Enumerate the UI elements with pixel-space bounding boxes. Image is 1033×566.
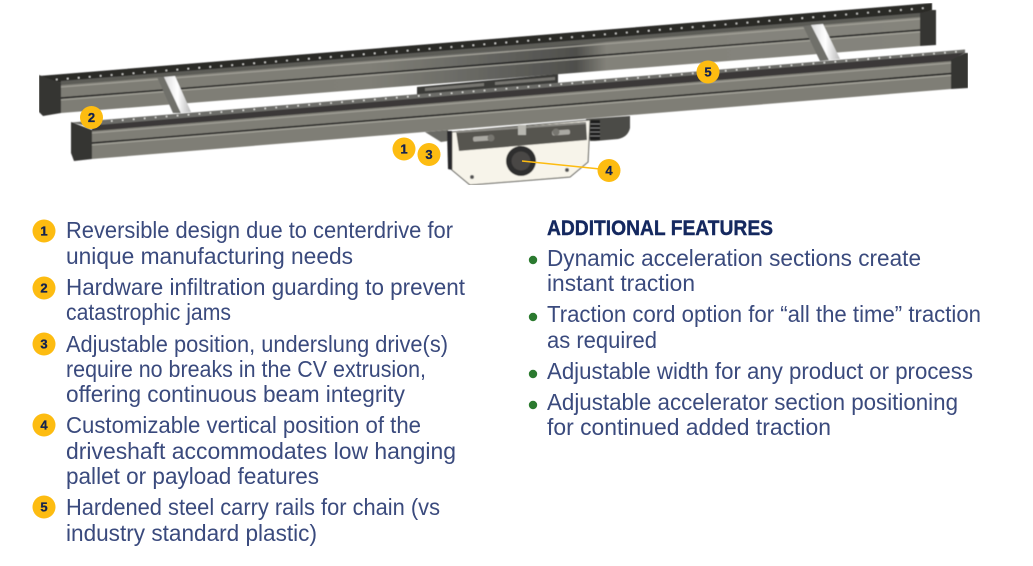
feature 3: require no breaks in the CV extrusion, bbox=[66, 356, 426, 382]
feature 5: Hardened steel carry rails for chain (vs bbox=[66, 494, 440, 520]
callout marker 2: 2 bbox=[88, 110, 95, 125]
bullet: dynamic acceleration: Dynamic acceleration sections create bbox=[547, 245, 921, 271]
motor bbox=[586, 116, 630, 141]
bullet: traction cord: Traction cord option for “all the time” traction bbox=[547, 301, 981, 327]
feature 4: driveshaft accommodates low hanging bbox=[66, 438, 456, 464]
feature 1 bbox=[32, 217, 453, 269]
bullet: accelerator positioning bbox=[529, 389, 958, 440]
centre drive mount behind rail bbox=[417, 74, 558, 100]
feature 1: 1 bbox=[40, 224, 48, 238]
feature 3 bbox=[32, 331, 448, 407]
callout marker 4 bbox=[598, 159, 620, 182]
additional features list bbox=[529, 245, 981, 440]
bullet: adjustable width: Adjustable width for any product or process bbox=[547, 358, 973, 384]
bullet: dynamic acceleration: instant traction bbox=[547, 270, 695, 296]
callout marker 5 bbox=[696, 60, 720, 84]
feature 3: 3 bbox=[40, 336, 48, 352]
feature 4 bbox=[32, 412, 456, 489]
feature 1: unique manufacturing needs bbox=[66, 243, 353, 269]
feature 2 bbox=[32, 274, 466, 325]
callout marker 1: 1 bbox=[400, 142, 408, 156]
feature 5: industry standard plastic) bbox=[66, 520, 317, 546]
feature 5 bbox=[32, 494, 440, 546]
drive plate bbox=[447, 120, 590, 185]
back rail bbox=[39, 3, 936, 116]
callout marker 3 bbox=[418, 143, 440, 166]
feature 4: Customizable vertical position of the bbox=[66, 412, 421, 438]
callout marker 4: 4 bbox=[605, 163, 613, 178]
bullet: accelerator positioning: Adjustable accelerator section positioning bbox=[547, 389, 958, 415]
front rail bbox=[71, 50, 968, 161]
bullet: traction cord bbox=[529, 301, 981, 353]
bullet: dynamic acceleration bbox=[529, 245, 921, 296]
feature 1: Reversible design due to centerdrive for bbox=[66, 217, 453, 243]
bullet: traction cord: as required bbox=[547, 327, 657, 353]
callout marker 3: 3 bbox=[425, 147, 433, 162]
feature 2: 2 bbox=[40, 280, 48, 296]
cross brace left bbox=[157, 76, 191, 113]
drive bracket left bbox=[425, 130, 448, 142]
feature 5: 5 bbox=[40, 500, 48, 514]
cross brace right bbox=[803, 24, 840, 61]
callout marker 1 bbox=[392, 138, 416, 160]
callout marker 2 bbox=[80, 106, 103, 129]
feature 2: Hardware infiltration guarding to prevent bbox=[66, 274, 466, 300]
feature 2: catastrophic jams bbox=[66, 299, 231, 325]
numbered feature list bbox=[32, 217, 466, 546]
feature 4: pallet or payload features bbox=[66, 463, 319, 489]
additional features heading: ADDITIONAL FEATURES bbox=[547, 217, 773, 240]
feature 3: offering continuous beam integrity bbox=[66, 381, 405, 407]
callout marker 5: 5 bbox=[704, 64, 712, 80]
feature 4: 4 bbox=[40, 418, 48, 432]
conveyor illustration bbox=[39, 3, 968, 185]
feature 3: Adjustable position, underslung drive(s) bbox=[66, 331, 448, 357]
drive shaft knob bbox=[506, 146, 536, 176]
drive cover plate bbox=[456, 122, 587, 151]
bullet: accelerator positioning: for continued added traction bbox=[547, 414, 831, 440]
leader line to callout 4 bbox=[522, 161, 600, 169]
